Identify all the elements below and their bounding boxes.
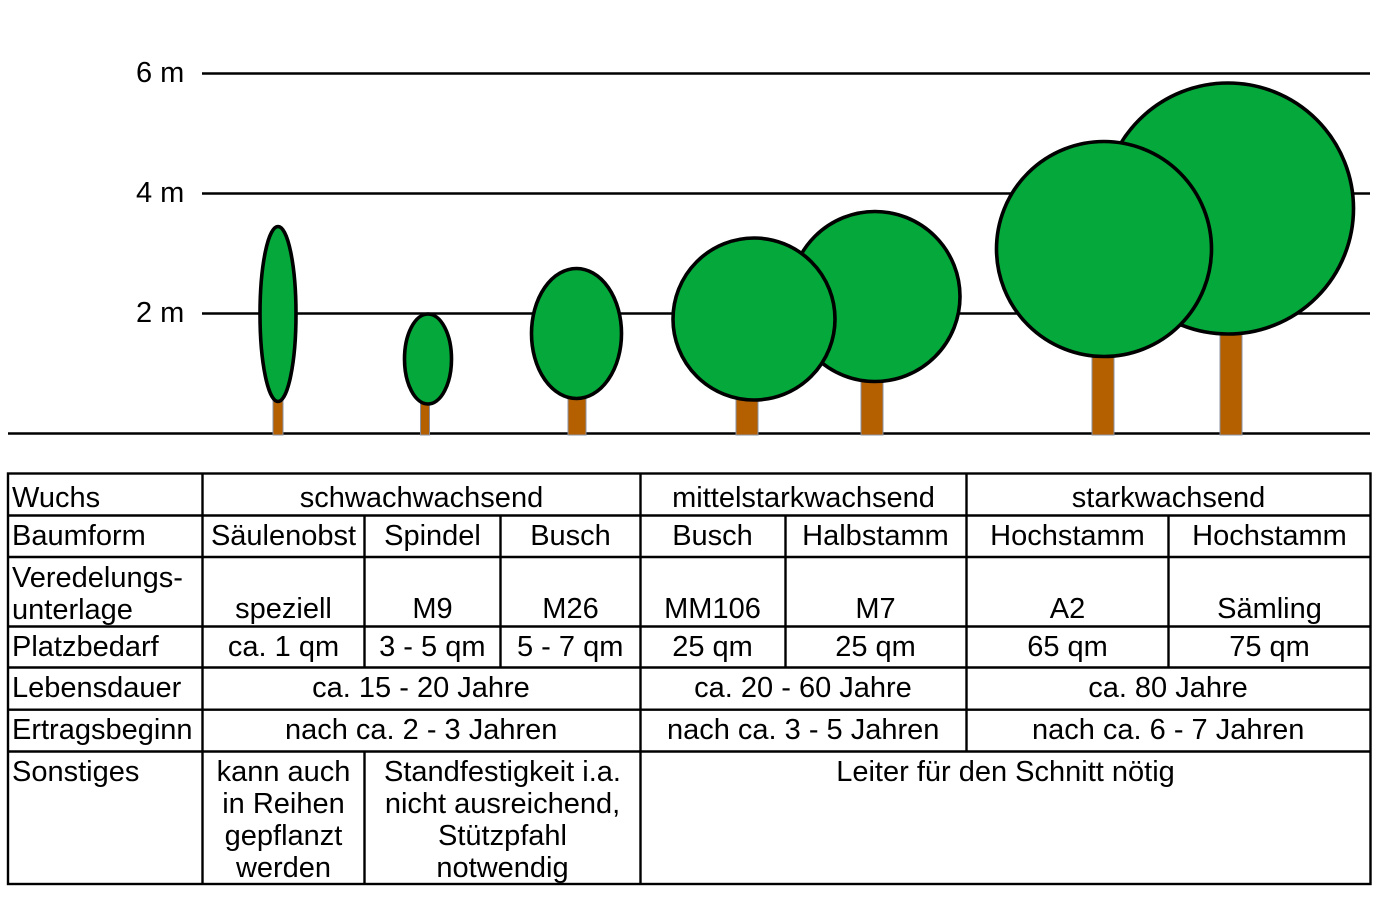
row: Sonstiges: kann auch bbox=[217, 756, 350, 788]
row: Veredelungsunterlage bbox=[235, 593, 1322, 625]
row: Platzbedarf: ca. 1 qm bbox=[228, 631, 339, 663]
tree: Busch MM106 bbox=[673, 238, 835, 435]
row: Veredelungsunterlage: A2 bbox=[1050, 593, 1085, 625]
row headings: Baumform bbox=[12, 520, 146, 552]
row: Platzbedarf: 75 qm bbox=[1229, 631, 1310, 663]
row: Ertragsbeginn bbox=[285, 714, 1304, 746]
row: Lebensdauer: ca. 15 - 20 Jahre bbox=[312, 672, 530, 704]
row: Wuchs: mittelstarkwachsend bbox=[672, 482, 935, 514]
tree: Spindel bbox=[404, 314, 452, 435]
table: tree form properties bbox=[8, 474, 1370, 884]
height axis labels: 4 m bbox=[136, 177, 184, 209]
row: Platzbedarf: 25 qm bbox=[672, 631, 753, 663]
row: Platzbedarf: 65 qm bbox=[1027, 631, 1108, 663]
row headings: Sonstiges bbox=[12, 756, 139, 788]
row: Lebensdauer: ca. 80 Jahre bbox=[1088, 672, 1248, 704]
row: Platzbedarf bbox=[228, 631, 1310, 663]
tree: Halbstamm bbox=[790, 212, 960, 435]
row headings: Wuchs bbox=[12, 482, 100, 514]
row: Lebensdauer bbox=[312, 672, 1248, 704]
row: Baumform: Halbstamm bbox=[802, 520, 949, 552]
row: Sonstiges: Standfestigkeit i.a. bbox=[384, 756, 621, 788]
row: Ertragsbeginn: nach ca. 3 - 5 Jahren bbox=[667, 714, 939, 746]
height axis labels bbox=[136, 57, 184, 329]
row: Veredelungsunterlage: Sämling bbox=[1217, 593, 1322, 625]
row: Sonstiges: Leiter für den Schnitt nötig bbox=[836, 756, 1175, 788]
row: Wuchs: starkwachsend bbox=[1072, 482, 1265, 514]
row: Baumform bbox=[211, 520, 1347, 552]
tree: Hochstamm A2 bbox=[996, 142, 1212, 435]
row: Baumform: Busch bbox=[672, 520, 753, 552]
row: Sonstiges: Stützpfahl bbox=[438, 820, 567, 852]
row: Wuchs bbox=[300, 482, 1265, 514]
row headings: Lebensdauer bbox=[12, 672, 182, 704]
row: Sonstiges: in Reihen bbox=[222, 788, 345, 820]
row: Sonstiges: gepflanzt bbox=[225, 820, 342, 852]
row: Sonstiges: notwendig bbox=[436, 852, 569, 884]
row headings: Ertragsbeginn bbox=[12, 714, 193, 746]
row: Platzbedarf: 25 qm bbox=[835, 631, 916, 663]
row: Veredelungsunterlage: MM106 bbox=[664, 593, 761, 625]
row: Wuchs: schwachwachsend bbox=[300, 482, 543, 514]
row headings bbox=[12, 482, 193, 788]
tree: Busch M26 bbox=[532, 268, 622, 435]
table grid bbox=[8, 474, 1370, 884]
row headings: Platzbedarf bbox=[12, 631, 160, 663]
row: Lebensdauer: ca. 20 - 60 Jahre bbox=[694, 672, 912, 704]
row headings: Veredelungs- bbox=[12, 562, 183, 594]
row: Ertragsbeginn: nach ca. 2 - 3 Jahren bbox=[285, 714, 557, 746]
row: Sonstiges: werden bbox=[235, 852, 331, 884]
row: Sonstiges: nicht ausreichend, bbox=[385, 788, 620, 820]
row: Platzbedarf: 3 - 5 qm bbox=[379, 631, 485, 663]
row: Baumform: Busch bbox=[530, 520, 611, 552]
row: Baumform: Hochstamm bbox=[1192, 520, 1347, 552]
row: Platzbedarf: 5 - 7 qm bbox=[517, 631, 623, 663]
height axis labels: 6 m bbox=[136, 57, 184, 89]
row: Veredelungsunterlage: speziell bbox=[235, 593, 332, 625]
row: Baumform: Spindel bbox=[384, 520, 481, 552]
row headings: unterlage bbox=[12, 594, 133, 626]
row: Baumform: Säulenobst bbox=[211, 520, 356, 552]
row: Ertragsbeginn: nach ca. 6 - 7 Jahren bbox=[1032, 714, 1304, 746]
row: Veredelungsunterlage: M9 bbox=[412, 593, 453, 625]
tree: Hochstamm Sämling bbox=[1102, 83, 1354, 435]
row: Veredelungsunterlage: M26 bbox=[542, 593, 599, 625]
row: Baumform: Hochstamm bbox=[990, 520, 1145, 552]
row: Veredelungsunterlage: M7 bbox=[855, 593, 896, 625]
height axis labels: 2 m bbox=[136, 297, 184, 329]
chart: tree heights bbox=[8, 57, 1370, 435]
tree: Säulenobst bbox=[260, 226, 296, 435]
row: Sonstiges bbox=[217, 756, 1175, 884]
